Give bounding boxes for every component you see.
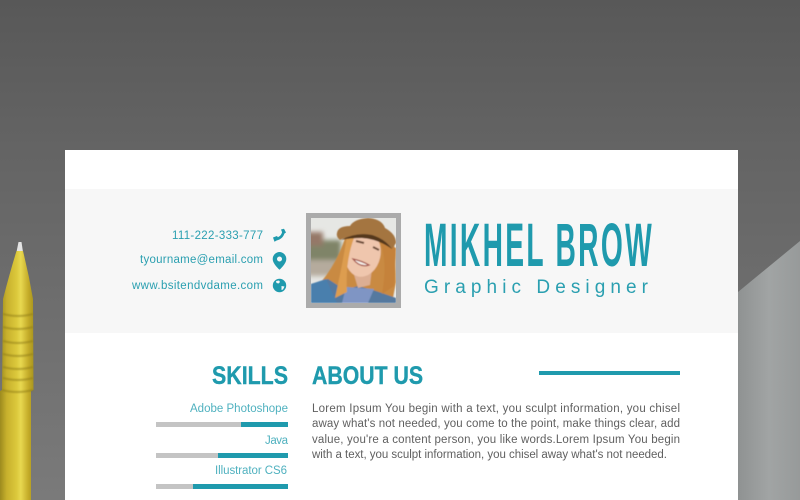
- email address: tyourname@email.com: [140, 254, 263, 266]
- grey wedge background: [738, 241, 800, 500]
- phone number: 111-222-333-777: [172, 230, 263, 242]
- pencil: [0, 242, 34, 500]
- about us heading: ABOUT US: [312, 362, 423, 390]
- neck: [354, 272, 372, 288]
- header band: [65, 189, 738, 333]
- denim jacket: [326, 278, 396, 303]
- skill: Adobe Photoshope: [156, 403, 288, 427]
- about us body text: value, you're a content person, you like words.Lorem Ipsum You begin: [312, 434, 680, 446]
- face: [346, 237, 382, 277]
- skill: Java: Java: [265, 435, 289, 447]
- skill: Adobe Photoshope: Adobe Photoshope: [190, 403, 288, 415]
- about us body text: away what's not needed, you come to the point, make things clear, add: [312, 418, 680, 430]
- photo frame: [306, 213, 401, 308]
- skill: Illustrator CS6: [156, 465, 288, 489]
- profile photo: [305, 213, 401, 308]
- resume paper: [65, 150, 738, 500]
- hair: [322, 238, 396, 298]
- about us body text: Lorem Ipsum You begin with a text, you sculpt information, you chisel: [312, 403, 680, 415]
- about us body text: with a text, you sculpt information, you chisel away what's not needed.: [311, 449, 667, 461]
- website: www.bsitendvdame.com: [131, 280, 263, 292]
- skills heading: SKILLS: [212, 362, 288, 390]
- contact list: [131, 230, 263, 292]
- hair strand: [335, 236, 354, 298]
- icon: phone: [273, 229, 286, 242]
- job title: Graphic Designer: [424, 277, 649, 298]
- hat: [337, 218, 396, 249]
- about us rule: [539, 371, 680, 375]
- skill: Java: [156, 435, 289, 458]
- about us body text: [311, 403, 680, 461]
- icon: globe: [273, 279, 286, 292]
- skill: Illustrator CS6: Illustrator CS6: [215, 465, 287, 477]
- icon: location pin: [273, 252, 286, 270]
- eyes and mouth: [356, 241, 379, 250]
